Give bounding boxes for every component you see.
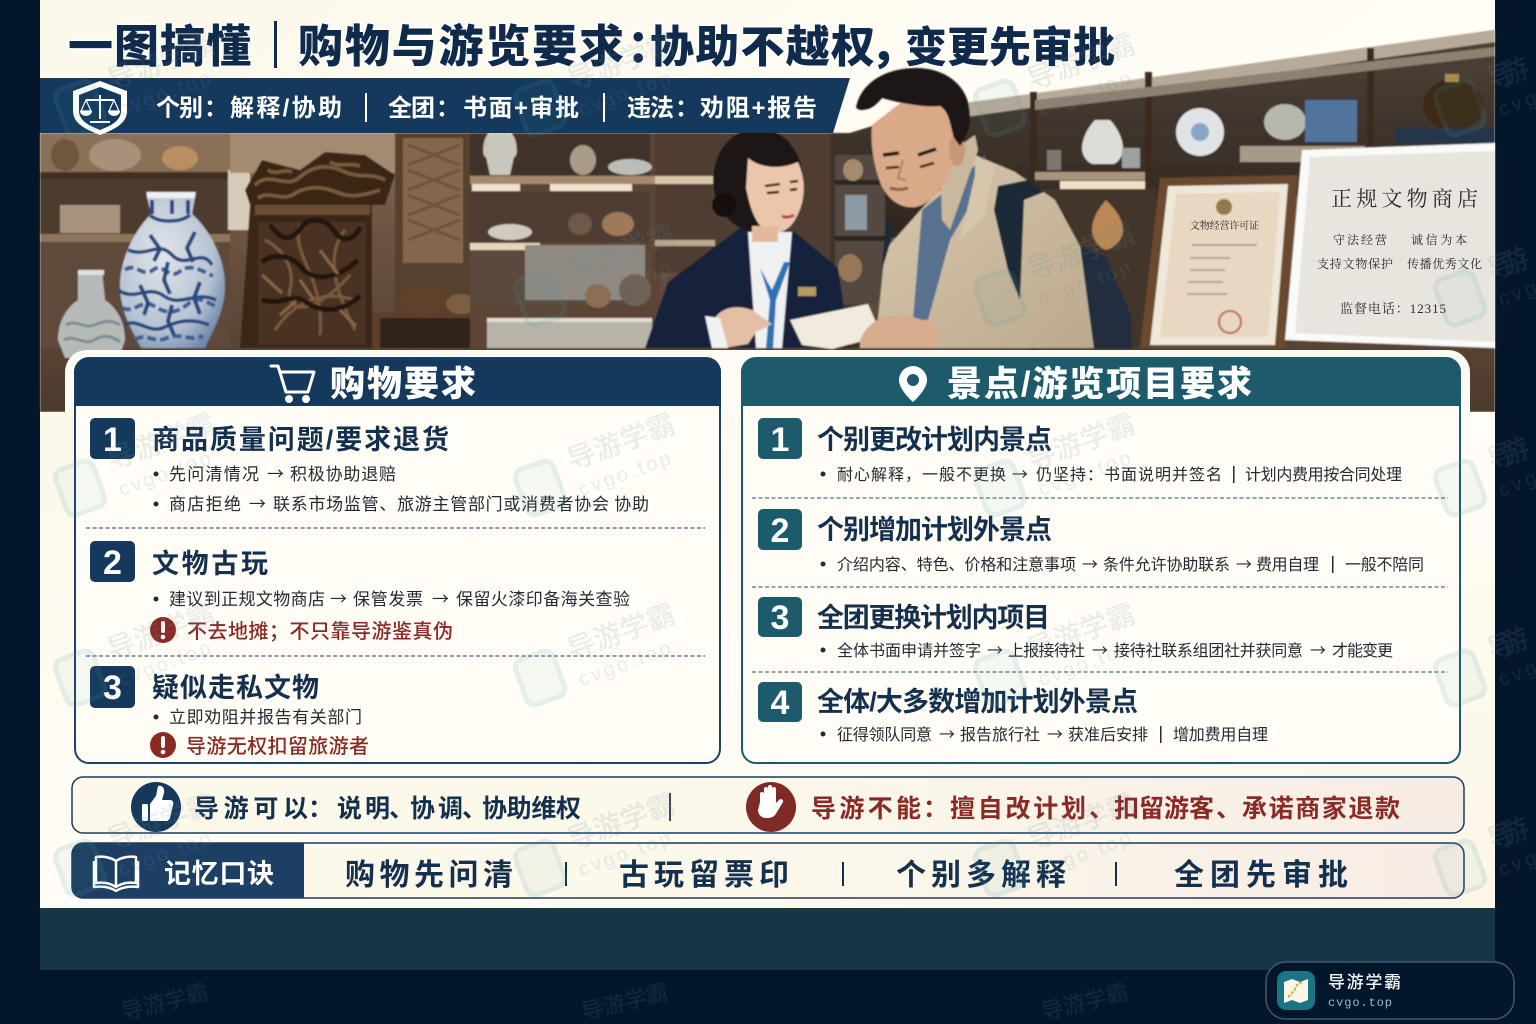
- ribbon text: 解释/协助: [230, 95, 342, 122]
- icon: warning: [150, 732, 176, 758]
- item 1: 仍坚持：书面说明并签名: [1036, 461, 1222, 485]
- mnemonic label: [72, 843, 304, 898]
- watermarks: cvgo.top: [1036, 446, 1137, 501]
- item 1: 积极协助退赔: [290, 460, 396, 485]
- carved wooden screen: [240, 152, 395, 348]
- title: ，: [870, 21, 915, 72]
- item 2: 介绍内容、特色、价格和注意事项: [837, 551, 1076, 575]
- watermarks: 导游学霸: [563, 408, 679, 476]
- item 1: 先问清情况: [169, 460, 259, 485]
- cannot text: 扣留游客: [1114, 794, 1214, 823]
- item 1: 耐心解释，一般不更换: [837, 461, 1006, 485]
- item 2: 保留火漆印备海关查验: [456, 585, 630, 610]
- watermarks: 导游学霸: [579, 979, 671, 1024]
- watermarks: 导游: [1483, 812, 1533, 856]
- item 2: 文物古玩: [152, 549, 268, 579]
- item 4: →: [1047, 721, 1063, 745]
- item 4: 全体/大多数增加计划外景点: [817, 687, 1138, 717]
- watermarks: cvgo.top: [1036, 826, 1137, 881]
- man tourist: [875, 155, 1094, 348]
- watermarks: 导游: [1483, 242, 1533, 286]
- big blue and white vase: [120, 192, 225, 348]
- item 2: [758, 509, 1424, 575]
- item 2: [90, 541, 630, 643]
- item 3: →: [1092, 637, 1108, 661]
- item 2: 2: [771, 512, 789, 550]
- item 1: 个别更改计划内景点: [817, 425, 1052, 455]
- mnemonic phrases: [345, 859, 1348, 892]
- mnemonic phrases: 购物先问清: [345, 859, 513, 892]
- item 1: 联系市场监管、旅游主管部门或消费者协会 协助: [273, 490, 649, 515]
- watermarks: cvgo.top: [116, 66, 217, 121]
- item 1: →: [267, 460, 284, 485]
- item 3: 接待社联系组团社并获同意: [1114, 637, 1303, 661]
- hero photo: antique shop scene: [40, 30, 1495, 412]
- item 3: 上报接待社: [1008, 637, 1085, 661]
- watermarks: cvgo.top: [1036, 256, 1137, 311]
- item 2: 个别增加计划外景点: [817, 515, 1052, 545]
- item 1: 计划内费用按合同处理: [1245, 461, 1402, 485]
- item 3: →: [1310, 637, 1326, 661]
- can text: 、: [389, 795, 414, 823]
- item 4: 征得领队同意: [837, 721, 932, 745]
- item 2: →: [1236, 551, 1252, 575]
- item 1: 1: [771, 421, 789, 459]
- ribbon text: 违法: [627, 95, 674, 122]
- item 3: 全体书面申请并签字: [837, 637, 981, 661]
- watermarks: 导游学霸: [1023, 408, 1139, 476]
- item 2: →: [1082, 551, 1098, 575]
- item 2: →: [330, 585, 347, 610]
- document: [790, 304, 882, 349]
- watermarks: 导游: [1483, 432, 1533, 476]
- watermarks: 导游学霸: [563, 598, 679, 666]
- ribbon text: ：: [436, 95, 460, 122]
- item 3: →: [987, 637, 1003, 661]
- can text: 协调: [410, 795, 463, 823]
- sign text: 支持文物保护: [1317, 256, 1393, 271]
- watermarks: 导游学霸: [103, 408, 219, 476]
- icon: thumbs up: [131, 782, 181, 832]
- cream lower sheet: [40, 412, 1495, 908]
- left shelves: [40, 133, 230, 348]
- title: 一图搞懂: [68, 21, 251, 72]
- can text: [194, 795, 581, 823]
- item 1: [758, 418, 1402, 485]
- panel header: attractions: [741, 358, 1461, 406]
- watermarks: 导游: [1483, 622, 1533, 666]
- ribbon text: [156, 93, 817, 122]
- small vase: [58, 270, 125, 358]
- cannot text: 擅自改计划: [950, 795, 1086, 823]
- watermarks: 导游学霸: [103, 788, 219, 856]
- right cabinets: [850, 30, 1495, 240]
- item 3: 才能变更: [1332, 637, 1393, 661]
- bottom band: [40, 908, 1495, 970]
- item 2: →: [432, 585, 449, 610]
- sign text: [1317, 187, 1482, 316]
- watermarks: 导游: [1483, 52, 1533, 96]
- watermarks: cvgo.top: [116, 826, 217, 881]
- framed licence: [1140, 175, 1298, 348]
- item 3: 导游无权扣留旅游者: [186, 735, 369, 758]
- watermarks: 导游学霸: [1023, 218, 1139, 286]
- item 4: 报告旅行社: [960, 721, 1040, 745]
- can text: 说明: [337, 795, 390, 823]
- sign text: 守法经营: [1333, 232, 1387, 247]
- brand badge: cvgo.top: [1328, 996, 1392, 1010]
- item 1: →: [1012, 461, 1028, 485]
- brand badge: [1266, 962, 1514, 1019]
- mnemonic phrases: 全团先审批: [1174, 859, 1348, 892]
- watermarks: 导游学霸: [103, 598, 219, 666]
- item 4: [758, 682, 1268, 745]
- watermarks: cvgo.top: [576, 826, 677, 881]
- item 3: [90, 666, 369, 758]
- ribbon text: 书面+审批: [463, 95, 579, 122]
- cannot text: ：: [923, 795, 948, 823]
- left stack behind man: [835, 155, 885, 305]
- icon: shield with scales: [73, 81, 127, 135]
- watermarks: 导游学霸: [1023, 598, 1139, 666]
- ribbon text: 劝阻+报告: [700, 95, 817, 122]
- item 1: [90, 418, 649, 515]
- cannot text: [811, 794, 1400, 823]
- item 4: 4: [771, 684, 790, 722]
- sign text: 传播优秀文化: [1407, 256, 1482, 271]
- icon: map logo: [1277, 971, 1315, 1010]
- icon: open book: [94, 857, 138, 891]
- woman guide: [645, 222, 850, 348]
- item 3: 疑似走私文物: [152, 673, 319, 703]
- sign text: 诚信为本: [1411, 232, 1467, 247]
- memory mnemonic bar: [72, 843, 1464, 898]
- can text: ：: [308, 795, 333, 823]
- watermarks: cvgo.top: [576, 636, 677, 691]
- item 2: 建议到正规文物商店: [169, 585, 325, 610]
- panel: attractions and itinerary requirements: [741, 358, 1461, 763]
- mnemonic label: 记忆口诀: [164, 859, 274, 889]
- item 2: 保管发票: [353, 585, 423, 610]
- watermarks: cvgo.top: [116, 636, 217, 691]
- mnemonic phrases: 古玩留票印: [619, 859, 789, 892]
- panel: shopping requirements: [74, 358, 721, 763]
- title: 变更先审批: [905, 24, 1115, 71]
- title: 购物与游览要求: [298, 21, 624, 72]
- sign text: 正规文物商店: [1331, 187, 1478, 211]
- panel header: attractions: 景点/游览项目要求: [947, 364, 1252, 404]
- icon: location pin: [899, 366, 927, 402]
- item 2: 一般不陪同: [1345, 551, 1424, 575]
- white card top behind panels: [65, 350, 1470, 412]
- can text: 导游可以: [194, 795, 308, 823]
- title: [68, 21, 1115, 72]
- watermarks: 导游学霸: [1039, 979, 1131, 1024]
- watermarks: 导游学霸: [563, 788, 679, 856]
- licence title: 文物经营许可证: [1190, 219, 1259, 232]
- item 4: 增加费用自理: [1173, 721, 1268, 745]
- mnemonic phrases: 个别多解释: [896, 859, 1066, 892]
- watermarks: 导游学霸: [563, 28, 679, 96]
- can text: 协助维权: [482, 795, 581, 823]
- cannot text: 导游不能: [811, 795, 921, 823]
- item 2: 条件允许协助联系: [1103, 551, 1230, 575]
- item 2: 2: [103, 544, 122, 582]
- ribbon: summary: [40, 78, 850, 135]
- item 1: 商品质量问题/要求退货: [152, 425, 449, 455]
- watermarks: 导游学霸: [1023, 788, 1139, 856]
- watermarks: cvgo.top: [576, 446, 677, 501]
- item 1: 1: [103, 421, 122, 459]
- centre cabinet: [470, 133, 660, 348]
- can / cannot bar: [72, 777, 1464, 833]
- item 2: 不去地摊；不只靠导游鉴真伪: [187, 620, 453, 643]
- title: 协助不越权: [650, 23, 875, 72]
- watermarks: cvgo.top: [1036, 636, 1137, 691]
- panel header: shopping: 购物要求: [330, 365, 476, 404]
- item 2: 费用自理: [1256, 551, 1319, 575]
- watermarks: cvgo.top: [576, 66, 677, 121]
- item 4: 获准后安排: [1068, 721, 1148, 745]
- cannot text: 、: [1089, 795, 1114, 823]
- tall panel: [395, 133, 470, 323]
- can text: 、: [462, 795, 487, 823]
- watermarks: cvgo.top: [1036, 66, 1137, 121]
- stool with pots: [372, 312, 486, 348]
- watermarks: 导游学霸: [119, 979, 211, 1024]
- cannot text: 、: [1216, 795, 1241, 823]
- icon: warning: [150, 617, 176, 643]
- ribbon text: 全团: [388, 95, 435, 122]
- title: ：: [627, 21, 672, 72]
- item 3: 3: [771, 599, 789, 637]
- watermarks: 导游学霸: [563, 218, 679, 286]
- item 3: 3: [103, 669, 122, 707]
- brand badge: 导游学霸: [1328, 972, 1401, 992]
- watermarks: cvgo.top: [576, 256, 677, 311]
- item 3: 全团更换计划内项目: [817, 603, 1050, 633]
- ribbon text: ：: [204, 95, 228, 122]
- item 1: →: [249, 490, 266, 515]
- ribbon text: ：: [675, 95, 699, 122]
- sign text: 监督电话：12315: [1340, 301, 1446, 316]
- white sign: [1285, 143, 1495, 348]
- watermarks: 导游学霸: [1023, 28, 1139, 96]
- item 3: [758, 597, 1393, 661]
- icon: shopping cart: [271, 366, 314, 402]
- cannot text: 承诺商家退款: [1242, 795, 1400, 823]
- item 4: →: [939, 721, 955, 745]
- ribbon text: 个别: [156, 95, 203, 122]
- item 1: 商店拒绝: [169, 490, 241, 515]
- icon: stop hand: [746, 782, 796, 832]
- panel header: shopping: [74, 358, 721, 406]
- item 3: 立即劝阻并报告有关部门: [169, 703, 362, 728]
- watermarks: 导游学霸: [103, 28, 219, 96]
- watermarks: cvgo.top: [116, 446, 217, 501]
